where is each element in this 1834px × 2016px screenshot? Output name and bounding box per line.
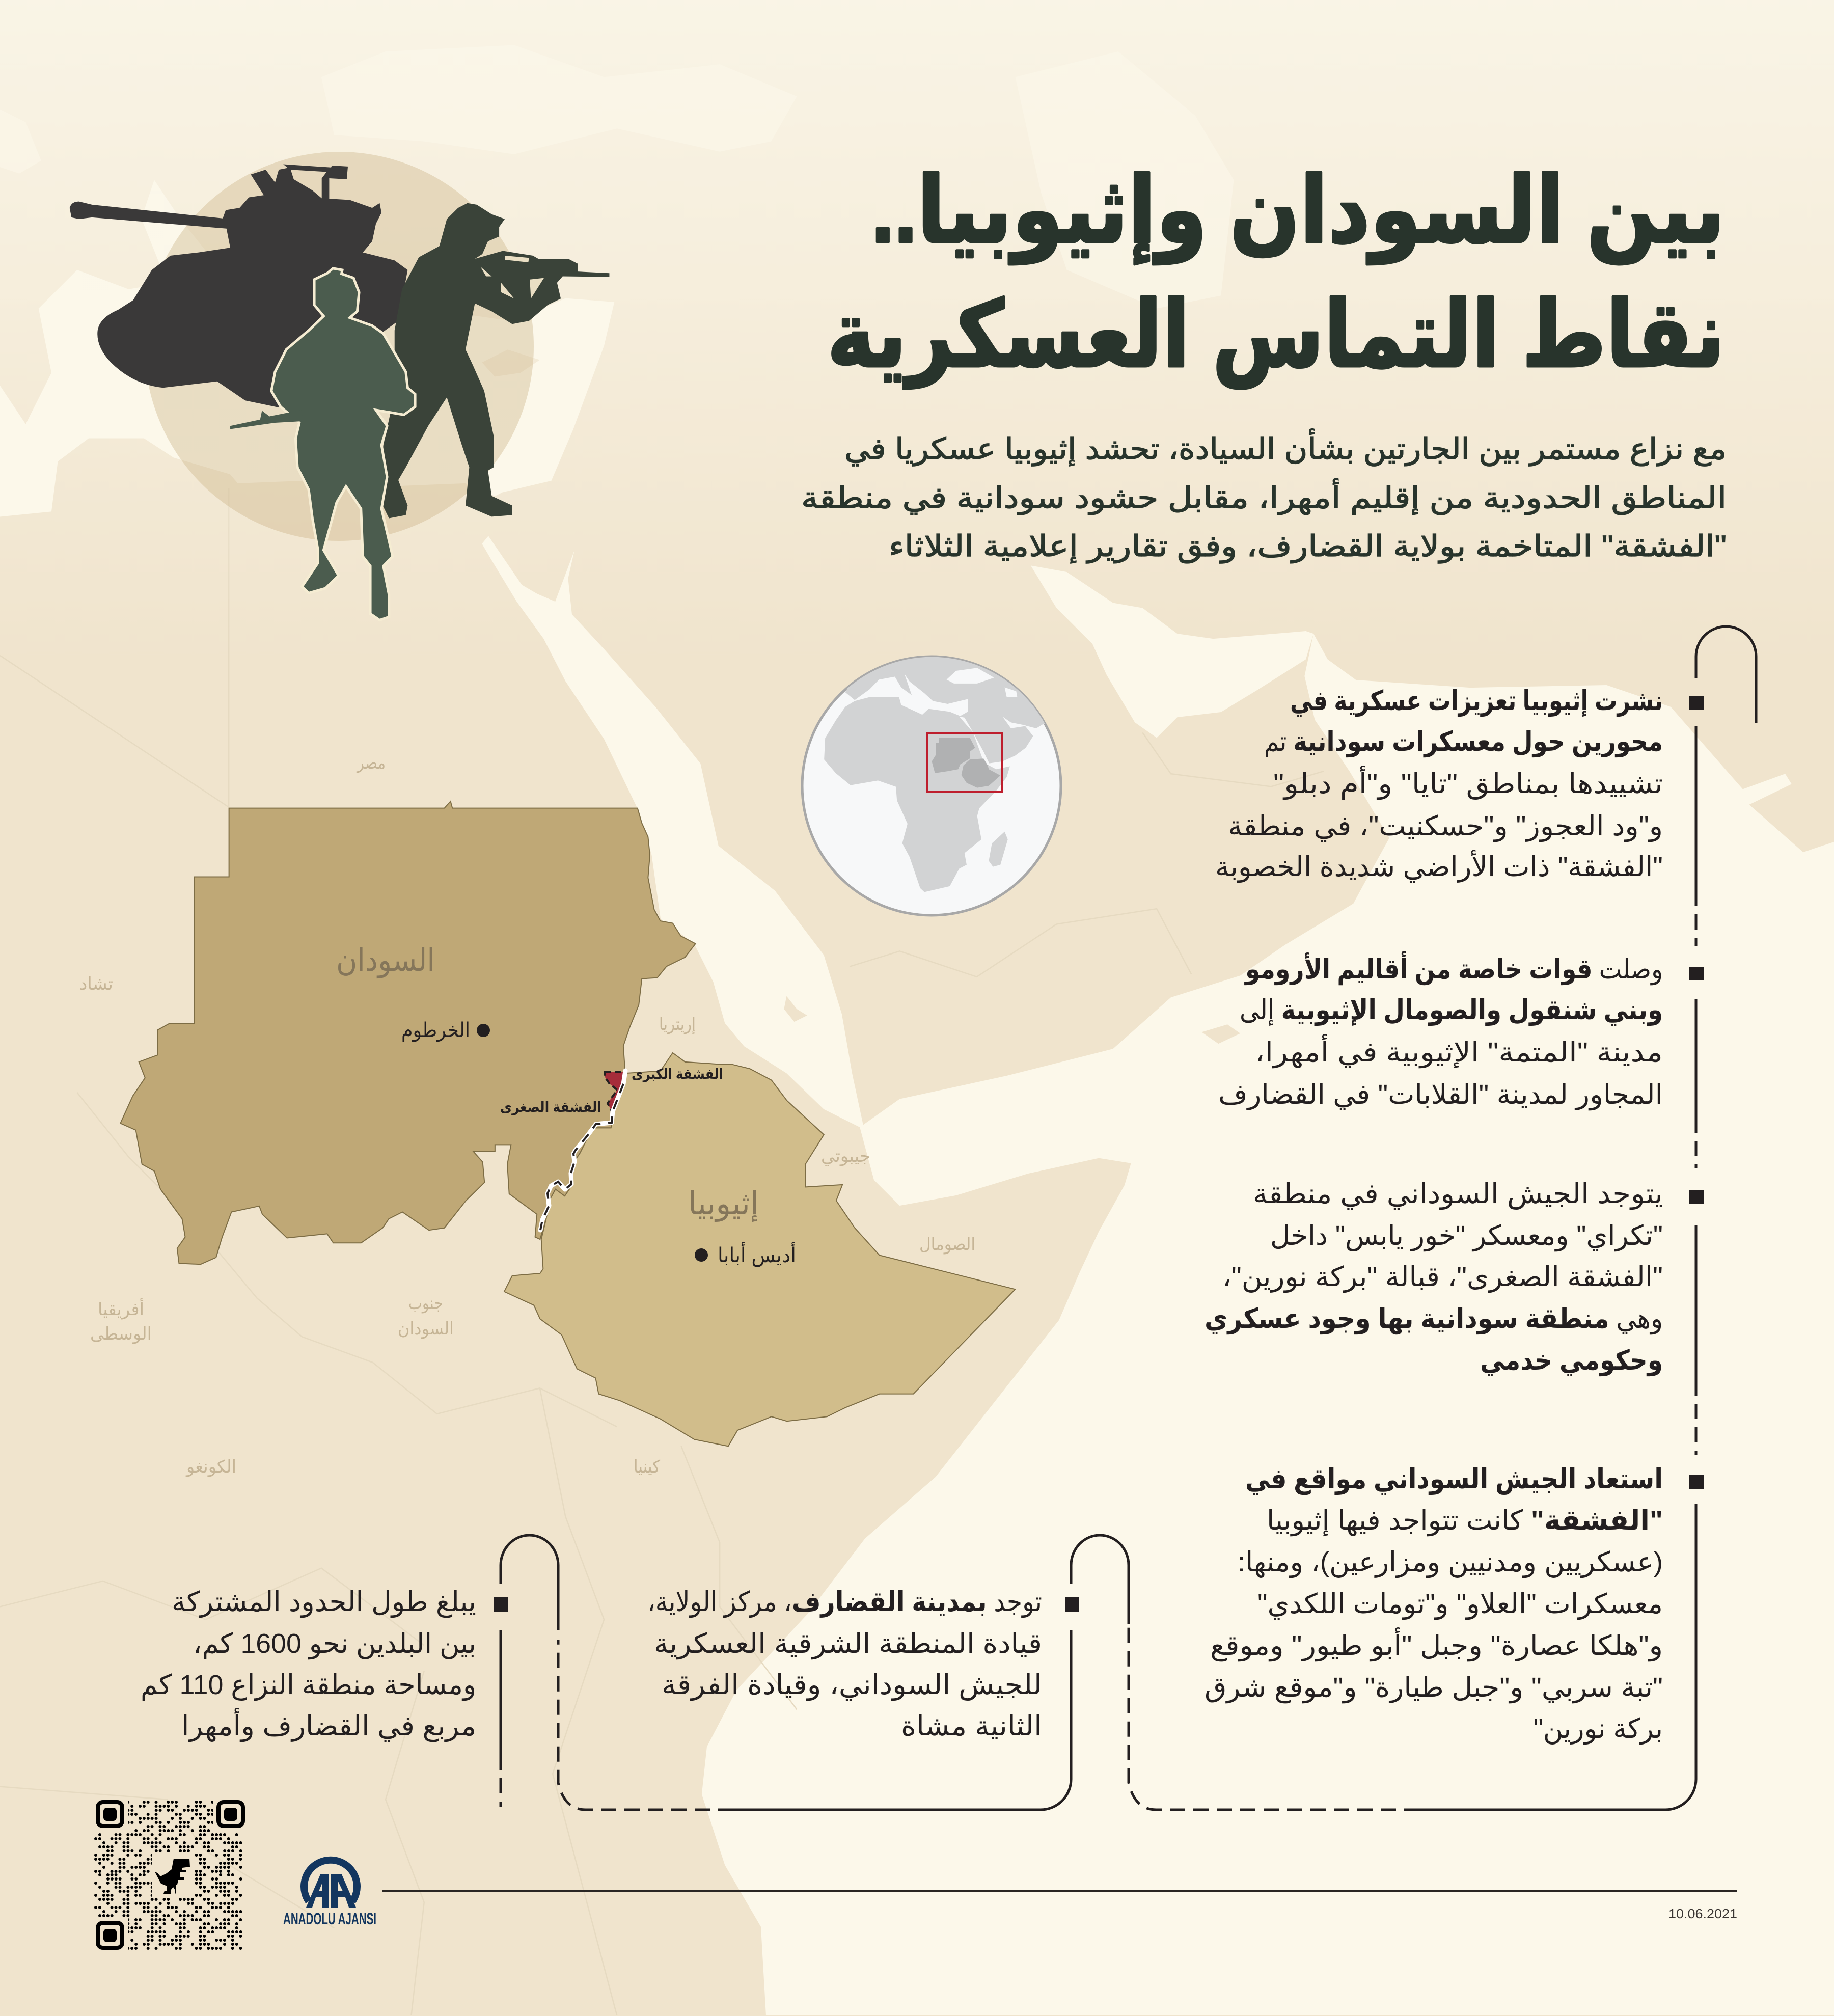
text lines: وهي منطقة سودانية بها وجود عسكري [1205,1303,1663,1334]
label: Addis Ababa [695,1242,796,1267]
red locator box [927,733,1002,792]
Sudan shape [120,801,696,1264]
text lines [1218,951,1663,1110]
title: نقاط التماس العسكرية [827,284,1725,389]
globe land masses [824,657,1045,892]
text lines: المجاور لمدينة "القلابات" في القضارف [1218,1079,1663,1110]
footer rule [382,1890,1737,1892]
icon: tank silhouette [70,164,407,407]
neighbouring country labels: كينيا [634,1457,661,1477]
text lines: و"ود العجوز" و"حسكنيت"، في منطقة [1228,811,1663,842]
text lines: قيادة المنطقة الشرقية العسكرية [654,1628,1042,1659]
label: Khartoum: الخرطوم [401,1019,470,1042]
text lines [1205,1464,1663,1745]
text lines: بركة نورين" [1534,1713,1663,1745]
text lines: و"هلكا عصارة" وجبل "أبو طيور" وموقع [1210,1627,1663,1662]
text lines: ومساحة منطقة النزاع 110 كم [141,1670,476,1701]
neighbouring country labels [79,753,975,1477]
date: 10.06.2021 [1668,1906,1737,1921]
text block 1 [1215,686,1704,883]
text lines: مدينة "المتمة" الإثيوبية في أمهرا، [1255,1034,1663,1068]
label: Greater Fashaga: الفشقة الكبرى [632,1066,723,1082]
text block 4 [1205,1464,1704,1745]
intro paragraph: المناطق الحدودية من إقليم أمهرا، مقابل حشود سودانية في منطقة [801,478,1727,515]
disputed Fashaga area [605,1072,624,1111]
text lines [141,1587,476,1742]
QR code [92,1797,248,1952]
bullet [1689,1190,1704,1204]
text block 5 [647,1587,1079,1741]
text lines: توجد بمدينة القضارف، مركز الولاية، [647,1587,1042,1618]
neighbouring country labels: الكونغو [185,1457,236,1477]
text lines: استعاد الجيش السوداني مواقع في [1245,1464,1663,1495]
label: Lesser Fashaga: الفشقة الصغرى [500,1099,601,1115]
neighbouring country labels: الصومال [919,1235,975,1255]
text lines: وحكومي خدمي [1480,1345,1663,1376]
text lines: مربع في القضارف وأمهرا [181,1708,476,1742]
map: Sudan and Ethiopia [79,753,1015,1477]
text lines [1215,686,1663,883]
bullet [1689,696,1704,710]
label: Ethiopia: إثيوبيا [688,1186,759,1222]
neighbouring country labels: تشاد [79,974,113,994]
logo: Anadolu Ajansi [283,1860,376,1928]
Ethiopia shape [504,1053,1015,1446]
text lines: (عسكريين ومدنيين ومزارعين)، ومنها: [1238,1547,1663,1578]
text lines: "تكراي" ومعسكر "خور يابس" داخل [1270,1220,1663,1251]
globe disc [802,657,1061,915]
neighbouring country labels: السودان [398,1319,454,1339]
text block 6 [141,1587,508,1742]
bullet [1689,1475,1704,1489]
illustration: tank and soldiers [70,152,609,620]
text lines: وبني شنقول والصومال الإثيوبية إلى [1240,995,1663,1026]
icon: standing soldier silhouette [230,268,415,620]
text block 3 [1205,1179,1704,1376]
neighbouring country labels: إريتريا [659,1015,696,1034]
text lines: بين البلدين نحو 1600 كم، [193,1628,476,1659]
text lines: يبلغ طول الحدود المشتركة [172,1587,476,1618]
neighbouring country labels: جيبوتي [821,1147,870,1166]
text lines: نشرت إثيوبيا تعزيزات عسكرية في [1290,686,1663,717]
text lines [647,1587,1042,1741]
bullet [494,1597,508,1612]
text lines: محورين حول معسكرات سودانية تم [1264,726,1663,757]
connector lines [501,626,1756,1810]
label: Sudan: السودان [336,943,435,978]
intro paragraph: "الفشقة" المتاخمة بولاية القضارف، وفق تقارير إعلامية الثلاثاء [889,530,1727,564]
text lines: وصلت قوات خاصة من أقاليم الأرومو [1244,951,1663,985]
bullet [1065,1597,1079,1612]
text lines: "الفشقة" كانت تتواجد فيها إثيوبيا [1267,1505,1663,1536]
text lines: تشييدها بمناطق "تايا" و"أم دبلو" [1273,766,1663,800]
bullet [1689,967,1704,980]
text lines: الثانية مشاة [901,1711,1042,1741]
icon: aiming soldier silhouette [379,203,609,519]
neighbouring country labels: مصر [356,753,386,773]
neighbouring country labels: جنوب [408,1294,443,1314]
text lines: "الفشقة" ذات الأراضي شديدة الخصوبة [1215,850,1663,883]
border line dashes [540,1084,623,1230]
neighbouring country labels: الوسطى [90,1324,152,1344]
text lines: معسكرات "العلاو" و"تومات اللكدي" [1257,1589,1663,1620]
icon: dino [155,1859,190,1894]
text lines: للجيش السوداني، وقيادة الفرقة [662,1670,1042,1701]
intro paragraph [801,428,1727,564]
title: بين السودان وإثيوبيا.. [871,159,1725,265]
text lines: "تبة سربي" و"جبل طيارة" و"موقع شرق [1205,1672,1663,1704]
backdrop circle [145,152,534,541]
intro paragraph: مع نزاع مستمر بين الجارتين بشأن السيادة، تحشد إثيوبيا عسكريا في [844,428,1727,467]
text lines: "الفشقة الصغرى"، قبالة "بركة نورين"، [1222,1262,1663,1293]
neighbouring country labels: أفريقيا [98,1298,144,1320]
locator globe [802,646,1061,915]
text block 2 [1218,951,1704,1110]
text lines: يتوجد الجيش السوداني في منطقة [1253,1179,1663,1210]
text lines [1205,1179,1663,1376]
label: Addis Ababa: أديس أبابا [718,1242,796,1267]
border line white [540,1071,625,1230]
logo: Anadolu Ajansi: ANADOLU AJANSI [283,1910,376,1928]
title [827,159,1725,389]
